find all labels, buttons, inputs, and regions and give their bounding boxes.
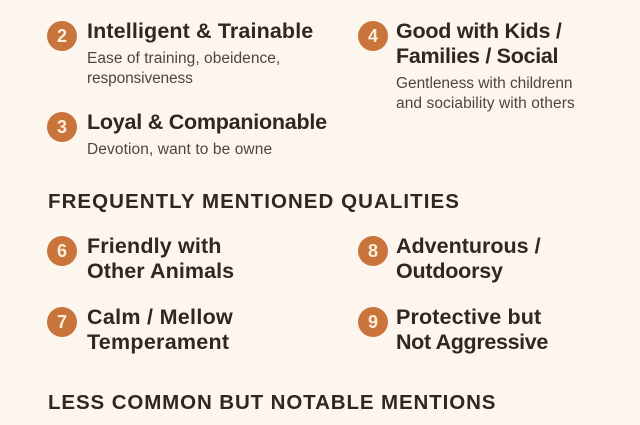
- heading: friendly with other animals: Other Animals: [87, 259, 234, 283]
- section heading: frequently mentioned qualities: FREQUENTLY MENTIONED QUALITIES: [48, 190, 460, 213]
- number badge 3: 3: [57, 117, 67, 137]
- description: gentleness: [396, 75, 575, 112]
- number badge 4: 4: [368, 26, 378, 46]
- heading: calm mellow temperament: Temperament: [87, 330, 229, 354]
- description: devotion: Devotion, want to be owne: [87, 141, 272, 158]
- heading: adventurous outdoorsy: Outdoorsy: [396, 259, 503, 283]
- item 9: protective but not aggressive: [358, 305, 548, 354]
- description: training: Ease of training, obeidence,: [87, 50, 280, 67]
- heading: good with kids, families, social: [396, 19, 562, 68]
- heading: adventurous outdoorsy: Adventurous /: [396, 234, 541, 258]
- heading: adventurous outdoorsy: [396, 234, 541, 283]
- heading: loyal and companionable: Loyal & Companionable: [87, 110, 327, 134]
- heading: friendly with other animals: [87, 234, 234, 283]
- number badge 4: [358, 21, 388, 51]
- number badge 6: [47, 236, 77, 266]
- heading: protective but not aggressive: Not Aggressive: [396, 330, 548, 354]
- number badge 9: [358, 307, 388, 337]
- heading: friendly with other animals: Friendly with: [87, 234, 222, 258]
- heading: protective but not aggressive: Protective but: [396, 305, 541, 329]
- heading: good with kids, families, social: Good with Kids /: [396, 19, 562, 43]
- number badge 8: [358, 236, 388, 266]
- heading: calm mellow temperament: [87, 305, 233, 354]
- heading: calm mellow temperament: Calm / Mellow: [87, 305, 233, 329]
- description: gentleness: Gentleness with childrenn: [396, 75, 572, 92]
- item 2: intelligent and trainable: [47, 19, 313, 87]
- heading: protective but not aggressive: [396, 305, 548, 354]
- description: training: [87, 50, 280, 87]
- number badge 8: 8: [368, 241, 378, 261]
- number badge 3: [47, 112, 77, 142]
- item 3: loyal and companionable: [47, 110, 327, 158]
- item 6: friendly with other animals: [47, 234, 234, 283]
- description: training: responsiveness: [87, 70, 193, 87]
- number badge 7: 7: [57, 312, 67, 332]
- heading: good with kids, families, social: Families / Social: [396, 44, 558, 68]
- number badge 7: [47, 307, 77, 337]
- number badge 2: 2: [57, 26, 67, 46]
- item 8: adventurous outdoorsy: [358, 234, 541, 283]
- number badge 6: 6: [57, 241, 67, 261]
- number badge 9: 9: [368, 312, 378, 332]
- number badge 2: [47, 21, 77, 51]
- item 4: good with kids: [358, 19, 575, 112]
- description: gentleness: and sociability with others: [396, 95, 575, 112]
- section heading: less common but notable mentions: LESS COMMON BUT NOTABLE MENTIONS: [48, 391, 496, 414]
- item 7: calm mellow temperament: [47, 305, 233, 354]
- heading: intelligent and trainable: Intelligent & Trainable: [87, 19, 313, 43]
